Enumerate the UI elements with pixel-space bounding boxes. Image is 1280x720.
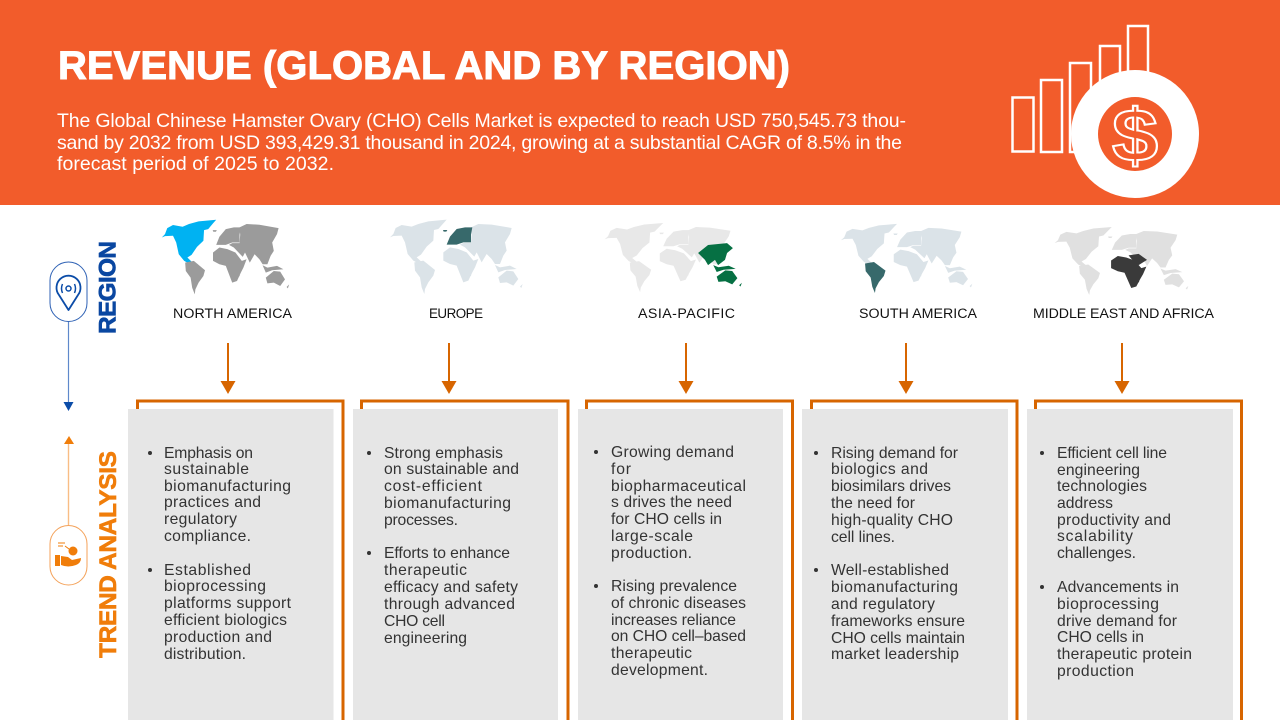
bullet list: efficacy and safety — [384, 579, 518, 596]
bullet list: production and — [164, 629, 272, 646]
panel: North America trends — [128, 401, 343, 720]
bullet list: biologics and — [831, 461, 928, 478]
bullet list: biomanufacturing — [164, 478, 291, 495]
bullet list: s drives the need — [611, 494, 732, 511]
region heading: REGION — [94, 241, 122, 334]
bullet list: biomanufacturing — [384, 495, 511, 512]
arrow: trend up — [64, 436, 74, 525]
arrow — [898, 343, 914, 394]
bullet list: production. — [611, 545, 692, 562]
panel: South America trends — [802, 401, 1017, 720]
bullet list: Efficient cell line — [1057, 445, 1167, 462]
bullet list: cost-efficient — [384, 478, 483, 495]
bullet list: the need for — [831, 495, 915, 512]
panel: Asia-Pacific trends — [578, 401, 792, 720]
bullet list: CHO cells in — [1057, 629, 1144, 646]
bullet list: cell lines. — [831, 529, 895, 546]
bullet list: address — [1057, 495, 1113, 512]
bullet list: sustainable — [164, 461, 249, 478]
arrow — [220, 343, 236, 394]
bullet list — [594, 444, 746, 679]
bullet list: for — [611, 461, 631, 478]
bullet list: Growing demand — [611, 444, 734, 461]
panel: Middle East and Africa trends — [1027, 401, 1242, 720]
bullet list: Rising prevalence — [611, 578, 737, 595]
bullet list: scalability — [1057, 528, 1133, 545]
label: EUROPE — [429, 306, 483, 321]
description text: The Global Chinese Hamster Ovary (CHO) Cells Market is expected to reach USD 750,545.73 thou- — [57, 110, 906, 132]
bullet list: regulatory — [164, 511, 237, 528]
bullet list — [1040, 445, 1192, 680]
bullet list: challenges. — [1057, 545, 1136, 562]
bullet list: therapeutic protein — [1057, 646, 1192, 663]
region column: Middle East and Africa — [1033, 227, 1215, 394]
bullet list: engineering — [1057, 462, 1140, 479]
label: NORTH AMERICA — [173, 306, 293, 322]
map: South America highlighted — [841, 224, 972, 293]
region column: South America — [841, 224, 978, 394]
region column: Asia-Pacific — [605, 223, 742, 394]
bullet list: for CHO cells in — [611, 511, 722, 528]
panel: Europe trends — [353, 401, 568, 720]
bullet list: frameworks ensure — [831, 613, 965, 630]
bullet list: high-quality CHO — [831, 512, 953, 529]
bullet list: of chronic diseases — [611, 595, 746, 612]
bullet list — [367, 445, 519, 647]
bullet list: compliance. — [164, 528, 251, 545]
label: MIDDLE EAST AND AFRICA — [1033, 306, 1215, 322]
bullet list: Established — [164, 562, 251, 579]
bullet list: through advanced — [384, 596, 515, 613]
bullet list: drive demand for — [1057, 613, 1177, 630]
region column: Europe — [390, 220, 523, 394]
bullet list: large-scale — [611, 528, 693, 545]
bullet list: CHO cell — [384, 613, 445, 630]
header banner — [0, 0, 1280, 205]
label: SOUTH AMERICA — [859, 306, 978, 322]
bullet list: biomanufacturing — [831, 579, 958, 596]
bullet list: Efforts to enhance — [384, 545, 510, 562]
arrow — [678, 343, 694, 394]
trend analysis label column — [50, 436, 122, 658]
bullet list: technologies — [1057, 478, 1147, 495]
bullet list: biosimilars drives — [831, 478, 951, 495]
arrow — [1114, 343, 1130, 394]
bullet list: Emphasis on — [164, 445, 253, 462]
region column: North America — [162, 220, 293, 394]
icon: hand with coin — [50, 526, 87, 585]
bullet list: engineering — [384, 630, 467, 647]
bullet list: and regulatory — [831, 596, 935, 613]
bullet list: biopharmaceutical — [611, 478, 746, 495]
bullet list — [148, 445, 292, 663]
bullet list: on sustainable and — [384, 461, 519, 478]
arrow: region down — [64, 322, 74, 411]
bullet list: platforms support — [164, 595, 292, 612]
bullet list: therapeutic — [611, 645, 692, 662]
description text — [57, 110, 906, 175]
bullet list: Strong emphasis — [384, 445, 503, 462]
region label column — [50, 241, 122, 411]
bullet list: increases reliance — [611, 612, 736, 629]
bullet list: Rising demand for — [831, 445, 958, 462]
bullet list: bioprocessing — [164, 578, 266, 595]
bullet list: market leadership — [831, 646, 959, 663]
bullet list: practices and — [164, 494, 261, 511]
map: Europe highlighted — [390, 220, 523, 294]
bullet list: Well-established — [831, 562, 949, 579]
label: ASIA-PACIFIC — [638, 306, 735, 322]
description text: sand by 2032 from USD 393,429.31 thousand in 2024, growing at a substantial CAGR of 8.5% in the — [57, 132, 902, 154]
trend analysis heading: TREND ANALYSIS — [95, 451, 122, 658]
bullet list: therapeutic — [384, 562, 467, 579]
bullet list: Advancements in — [1057, 579, 1179, 596]
map: Middle East and Africa highlighted — [1055, 227, 1188, 295]
bullet list: on CHO cell–based — [611, 628, 746, 645]
icon: location pin — [50, 262, 87, 322]
bullet list: processes. — [384, 512, 458, 529]
bullet list — [814, 445, 965, 663]
title: REVENUE (GLOBAL AND BY REGION) — [58, 44, 790, 88]
bullet list: CHO cells maintain — [831, 630, 965, 647]
bullet list: bioprocessing — [1057, 596, 1159, 613]
bullet list: production — [1057, 663, 1134, 680]
bullet list: development. — [611, 662, 708, 679]
arrow — [442, 343, 456, 394]
icon: revenue bars and dollar coin — [1012, 26, 1199, 198]
description text: forecast period of 2025 to 2032. — [57, 153, 334, 175]
bullet list: distribution. — [164, 646, 246, 663]
map: Asia-Pacific highlighted — [605, 223, 742, 292]
icon: revenue bars and dollar coin: $ — [1112, 94, 1158, 177]
map: North America highlighted — [162, 220, 289, 294]
bullet list: efficient biologics — [164, 612, 287, 629]
bullet list: productivity and — [1057, 512, 1171, 529]
